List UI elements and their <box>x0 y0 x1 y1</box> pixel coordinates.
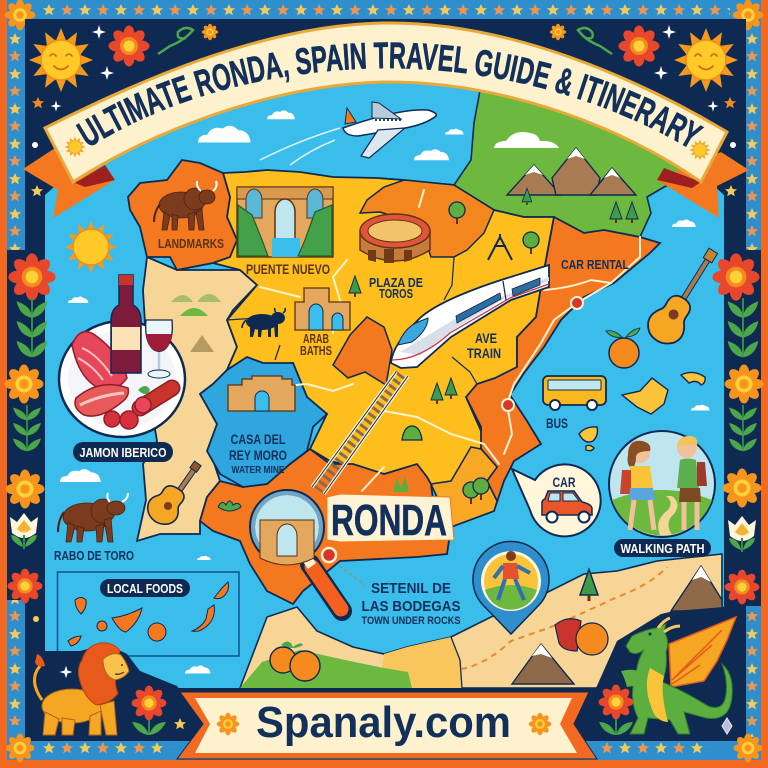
icon: AVE train <box>391 265 549 368</box>
callout: hikers walking path <box>609 431 715 537</box>
region: Andalusia orange <box>200 449 451 604</box>
label: Bus: BUS <box>546 415 568 431</box>
label: Landmarks: LANDMARKS <box>158 236 224 251</box>
icon: bus <box>543 376 606 410</box>
icon: wine bottle <box>111 275 141 373</box>
icon: dragon <box>621 617 736 734</box>
roads <box>258 190 640 491</box>
map sea panel <box>45 70 724 688</box>
label: Setenil de las Bodegas: SETENIL DE <box>371 580 451 597</box>
inner region lines <box>227 257 477 384</box>
region: Casa del Rey Moro blue <box>200 357 327 487</box>
map pins <box>502 297 583 411</box>
label: Puente Nuevo: PUENTE NUEVO <box>246 262 330 277</box>
label: AVE train <box>467 331 501 361</box>
icon: hiker map pin <box>473 541 549 634</box>
icon: guitar right <box>641 241 729 351</box>
icon: mountains in France <box>494 132 638 223</box>
region: Casa del Rey Moro blue: WATER MINE <box>232 465 285 476</box>
icon: navy bull <box>242 308 285 337</box>
label: Walking Path pill: WALKING PATH <box>620 541 704 556</box>
label: AVE train: TRAIN <box>467 346 501 361</box>
panel: Canary Islands local foods <box>58 572 239 656</box>
right floral column <box>712 253 763 604</box>
icon: smiling sun left <box>29 28 93 92</box>
icon: smiling sun right <box>674 28 738 92</box>
label: Setenil de las Bodegas <box>362 580 460 627</box>
land: Spain mainland yellow <box>213 170 554 527</box>
region: Casa del Rey Moro blue: CASA DEL <box>230 432 286 447</box>
icon: magnifying glass <box>252 492 342 611</box>
icon: wine glass <box>146 320 172 378</box>
title banner: ULTIMATE RONDA, SPAIN TRAVEL GUIDE & ITINERARY <box>76 42 704 147</box>
region: Catalonia and Valencia orange <box>466 217 660 511</box>
icon: casa del rey moro castle <box>228 376 295 411</box>
land: France green <box>454 85 700 237</box>
icon: lion <box>34 643 129 735</box>
navy corner behind lion <box>45 644 205 741</box>
left floral column <box>5 253 56 622</box>
icon: plain sun <box>65 221 117 273</box>
region: Casa del Rey Moro blue: REY MORO <box>229 448 287 463</box>
icon: oranges bottom left <box>270 641 320 681</box>
icon: orange fruit <box>606 328 640 368</box>
icon: pot and orange <box>555 619 608 655</box>
icon: Plaza de Toros <box>360 214 430 263</box>
icon: small trees and bushes <box>171 202 539 511</box>
region: Galicia orange <box>128 160 237 270</box>
icon: Puente Nuevo bridge <box>237 187 333 257</box>
icon: flower near lion <box>132 686 186 735</box>
callout: car bubble: CAR <box>552 474 576 490</box>
label: Toros: TOROS <box>379 286 413 301</box>
top corner decorations <box>31 24 737 196</box>
land: North Africa <box>240 554 722 688</box>
icon: bull Rabo de Toro <box>58 493 128 542</box>
region: Murcia <box>431 447 497 527</box>
navy corner behind dragon <box>574 607 724 741</box>
callout: car bubble <box>512 464 601 536</box>
banner ribbon tails <box>23 148 749 218</box>
icon: food plate <box>59 321 185 437</box>
red pin with dashed leader <box>322 548 365 585</box>
region: Aragon orange <box>360 180 494 257</box>
navy top corner backdrop <box>25 19 746 195</box>
bottom website banner <box>177 692 597 759</box>
icon: airplane <box>260 102 436 165</box>
label: Jamon Iberico pill: JAMON IBERICO <box>80 445 166 460</box>
label: Rabo de Toro: RABO DE TORO <box>54 548 134 563</box>
label: Car Rental: CAR RENTAL <box>561 257 629 272</box>
land: Portugal <box>137 257 257 541</box>
label: Plaza de: PLAZA DE <box>369 275 423 290</box>
label: Setenil de las Bodegas: TOWN UNDER ROCKS <box>362 615 460 627</box>
icon: brown bull Landmarks <box>154 181 217 230</box>
Ronda label: RONDA <box>331 496 447 545</box>
icon: pine tree and mountains south <box>512 566 722 684</box>
label: Jamon Iberico pill <box>73 442 173 462</box>
panel: Canary Islands local foods: LOCAL FOODS <box>107 581 183 596</box>
label: AVE train: AVE <box>475 331 497 346</box>
label: Baths: BATHS <box>300 344 332 358</box>
icon: clouds <box>60 110 710 673</box>
bottom website banner: Spanaly.com <box>256 698 511 747</box>
label: Arab: ARAB <box>303 332 329 346</box>
railway track <box>312 372 408 494</box>
icon: guitar left <box>142 453 209 530</box>
icon: flower near dragon <box>599 685 633 735</box>
region: Madrid orange <box>333 317 392 385</box>
Balearic Islands <box>579 372 705 451</box>
icon: Arab Baths <box>295 288 350 330</box>
label: Setenil de las Bodegas: LAS BODEGAS <box>362 598 460 615</box>
